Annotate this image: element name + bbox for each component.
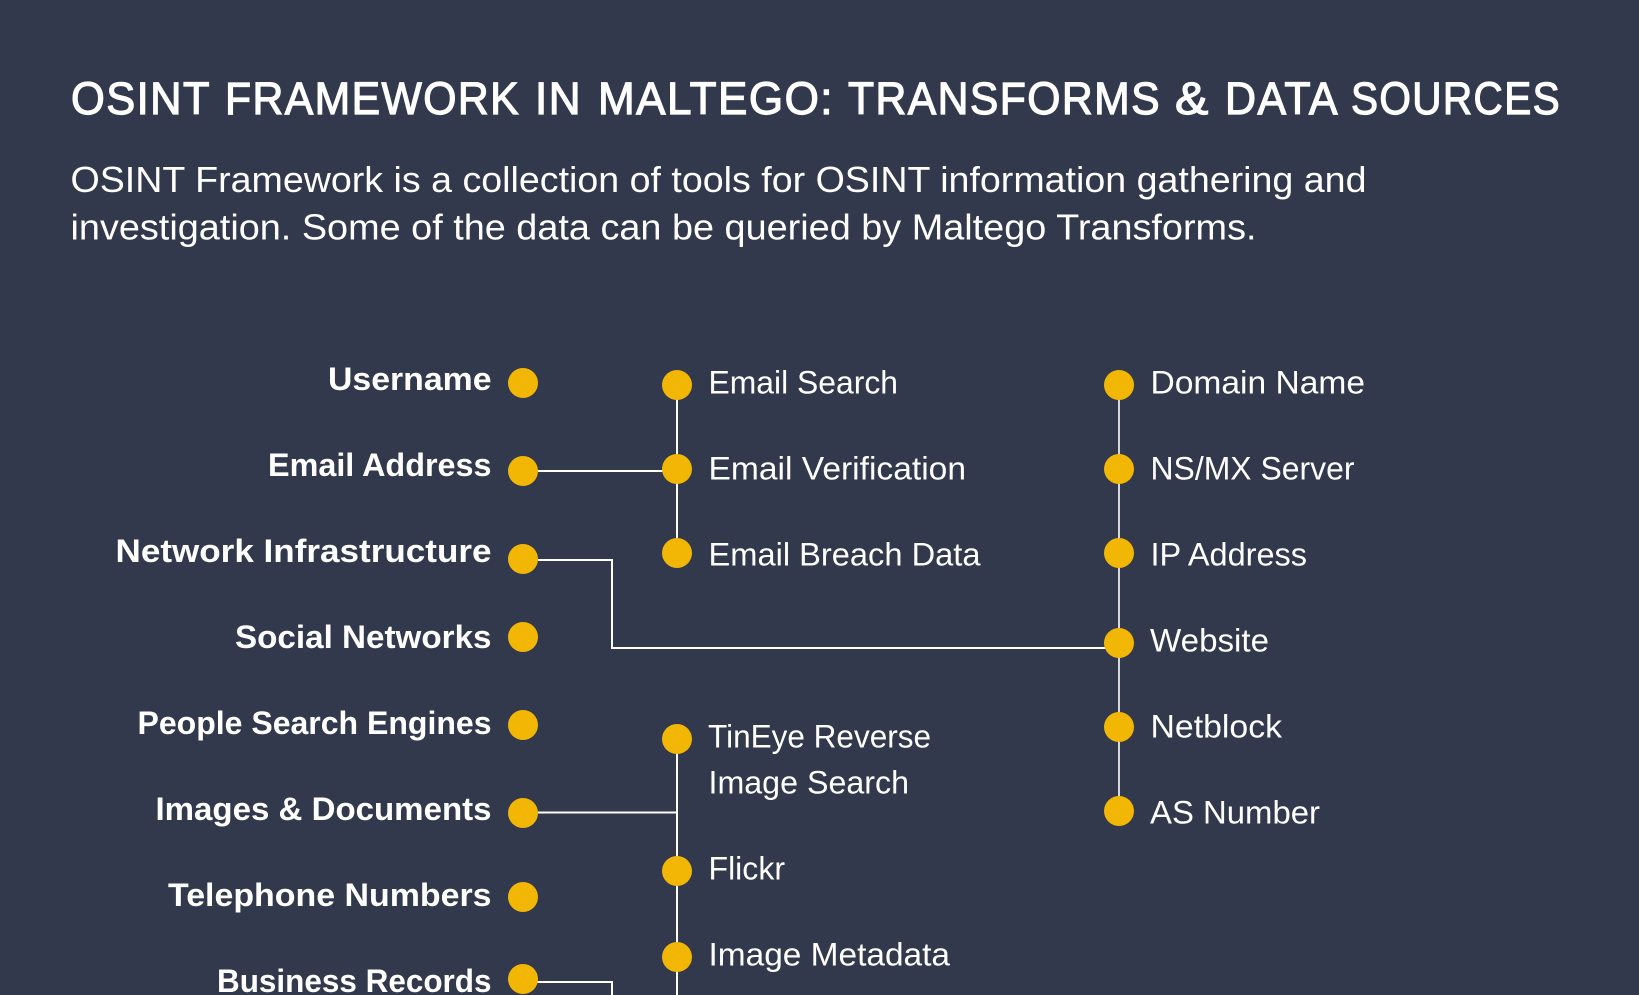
column: OSINT categories [116, 361, 538, 995]
title: OSINT [71, 73, 211, 124]
category: Network Infrastructure: Network Infrastructure [116, 533, 492, 569]
title: FRAMEWORK [225, 73, 520, 124]
item: TinEye Reverse Image Search: TinEye Reverse [708, 718, 931, 754]
category: Images & Documents: Images & Documents [156, 791, 492, 827]
column: email and image transforms [662, 364, 981, 972]
item: Email Breach Data: Email Breach Data [708, 536, 981, 572]
category: Social Networks: Social Networks [235, 619, 492, 655]
intro paragraph: investigation. Some of the data can be queried by Maltego Transforms. [70, 206, 1256, 248]
item: Email Verification: Email Verification [708, 450, 966, 486]
title: DATA [1225, 73, 1339, 124]
item: Website [1104, 622, 1269, 658]
connector lines [523, 385, 1119, 995]
item: Flickr [662, 850, 785, 886]
title: TRANSFORMS [848, 73, 1161, 124]
item: Netblock: Netblock [1150, 708, 1283, 744]
item: Flickr: Flickr [708, 850, 785, 886]
item: NS/MX Server: NS/MX Server [1150, 450, 1355, 486]
title: IN [535, 73, 582, 124]
item: Netblock [1104, 708, 1283, 744]
item: Website: Website [1150, 622, 1269, 658]
intro paragraph [70, 159, 1366, 248]
title: MALTEGO: [598, 73, 834, 124]
item: AS Number: AS Number [1150, 794, 1320, 830]
item: TinEye Reverse Image Search [662, 718, 931, 800]
title: SOURCES [1351, 73, 1561, 124]
item: Image Metadata: Image Metadata [708, 936, 950, 972]
item: Domain Name: Domain Name [1150, 364, 1365, 400]
title [71, 73, 1561, 124]
column: network transforms [1104, 364, 1365, 830]
intro paragraph: OSINT Framework is a collection of tools for OSINT information gathering and [70, 159, 1366, 200]
category: Username: Username [328, 361, 492, 397]
item: TinEye Reverse Image Search: Image Search [708, 764, 909, 800]
title: & [1175, 73, 1210, 124]
item: Email Search: Email Search [708, 364, 898, 400]
item: IP Address: IP Address [1150, 536, 1307, 572]
category: Email Address: Email Address [268, 447, 492, 483]
category: Telephone Numbers: Telephone Numbers [168, 877, 492, 913]
category: People Search Engines: People Search Engines [138, 705, 492, 741]
